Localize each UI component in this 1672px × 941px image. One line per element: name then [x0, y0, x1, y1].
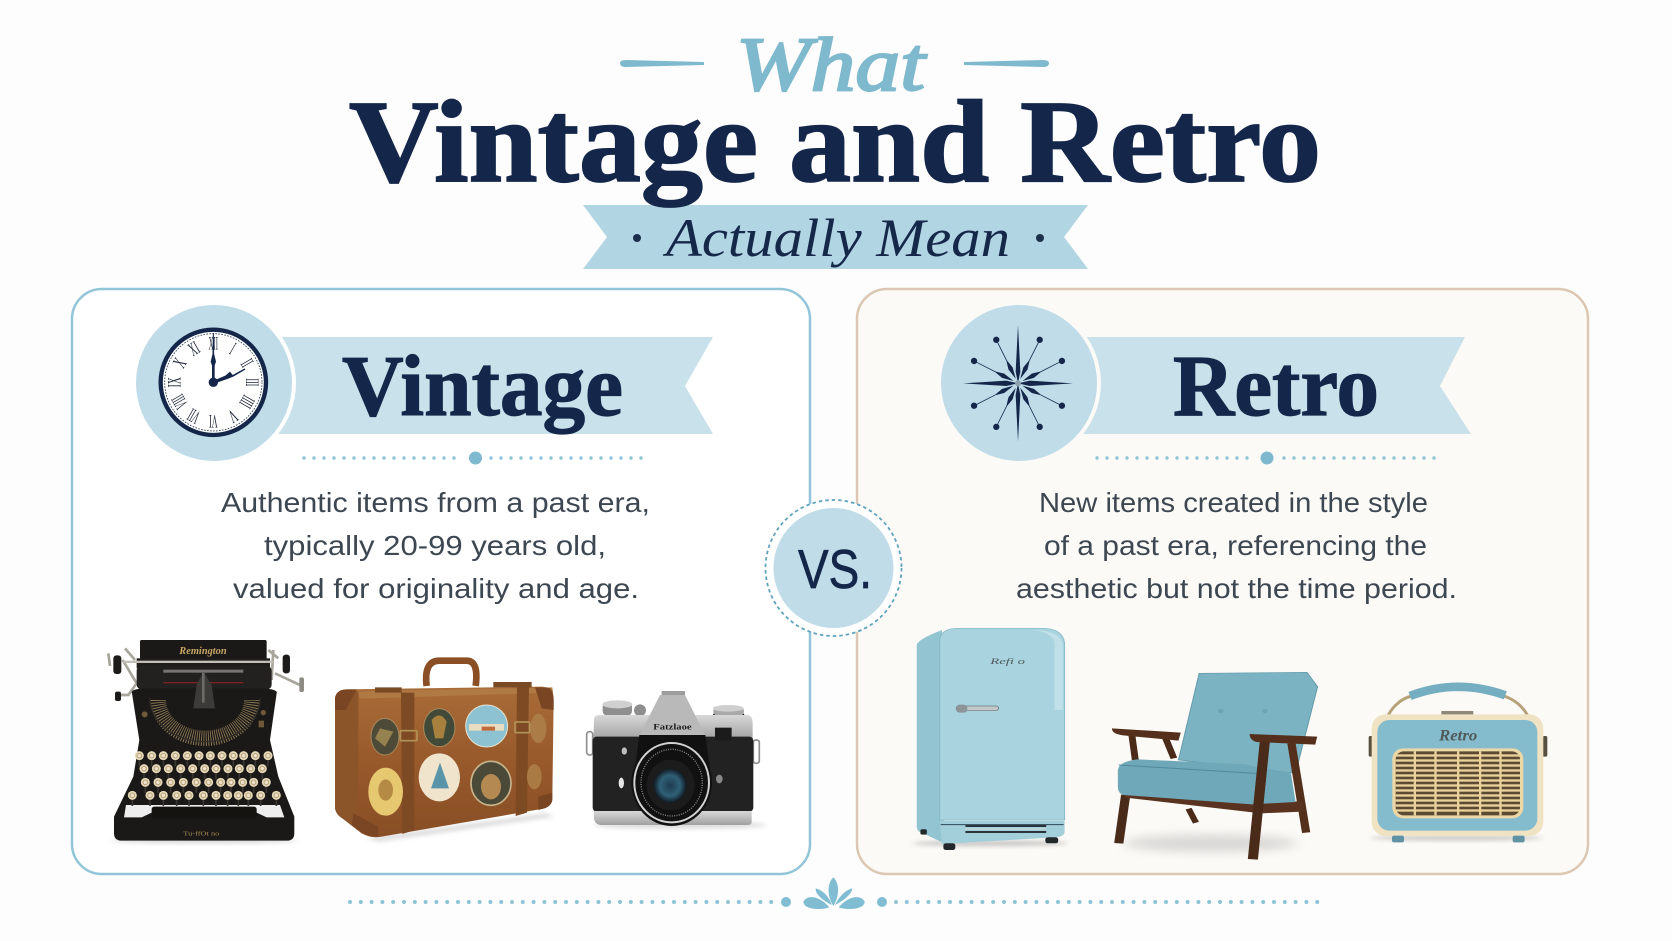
vintage divider — [304, 452, 650, 464]
icon: camera — [587, 691, 767, 829]
title: What with flanking rules: What — [736, 23, 927, 107]
vintage panel frame — [72, 289, 810, 874]
vintage ribbon heading: Vintage — [342, 337, 623, 434]
icon: clock: III — [241, 378, 262, 386]
icon: clock: XII — [209, 334, 218, 355]
retro ribbon heading: Retro — [1173, 337, 1379, 434]
subtitle ribbon — [583, 205, 1088, 269]
vintage description: valued for originality and age. — [233, 573, 639, 604]
icon: clock: IIII — [235, 392, 258, 411]
icon: armchair — [1112, 672, 1318, 859]
icon: clock: II — [236, 356, 257, 371]
icon: typewriter — [108, 640, 304, 843]
retro ribbon heading — [1075, 337, 1471, 434]
vs badge: VS. — [798, 538, 872, 600]
subtitle ribbon: Actually Mean — [663, 208, 1010, 268]
icon: clock: I — [226, 340, 239, 359]
icon: camera: Fatzlaoe — [653, 721, 692, 731]
icon: clock: VIII — [168, 391, 193, 412]
retro description: aesthetic but not the time period. — [1016, 573, 1457, 604]
icon: radio — [1369, 687, 1547, 842]
icon: clock — [132, 301, 296, 465]
icon: clock: VII — [184, 404, 204, 427]
retro divider — [1097, 452, 1437, 464]
icon: radio: Retro — [1438, 727, 1478, 744]
vintage description: Authentic items from a past era, — [221, 487, 650, 518]
icon: suitcase — [335, 661, 555, 842]
icon: typewriter: Remington — [178, 646, 227, 657]
vintage description — [221, 487, 650, 604]
vintage ribbon heading — [270, 337, 713, 434]
icon: starburst — [937, 301, 1101, 465]
retro description: of a past era, referencing the — [1044, 530, 1427, 561]
footer ornament — [350, 877, 1322, 909]
retro panel frame — [857, 289, 1588, 874]
icon: typewriter: Tu-ffOt no — [183, 830, 220, 837]
retro description: New items created in the style — [1039, 487, 1428, 518]
vintage description: typically 20-99 years old, — [264, 530, 606, 561]
main title: Vintage and Retro — [349, 76, 1321, 207]
icon: clock: XI — [185, 338, 204, 361]
icon: clock: IX — [165, 377, 186, 387]
panel: retro — [857, 289, 1588, 874]
title: What with flanking rules — [620, 23, 1049, 107]
icon: refrigerator — [912, 628, 1068, 850]
icon: clock: V — [224, 404, 241, 426]
title block — [349, 23, 1321, 269]
icon: clock: X — [169, 355, 191, 372]
icon: clock: VI — [209, 410, 218, 431]
vs badge — [766, 500, 902, 636]
icon: flourish — [803, 877, 865, 909]
retro description — [1016, 487, 1457, 604]
panel: vintage — [72, 289, 810, 874]
icon: refrigerator: Refi o — [989, 657, 1025, 666]
